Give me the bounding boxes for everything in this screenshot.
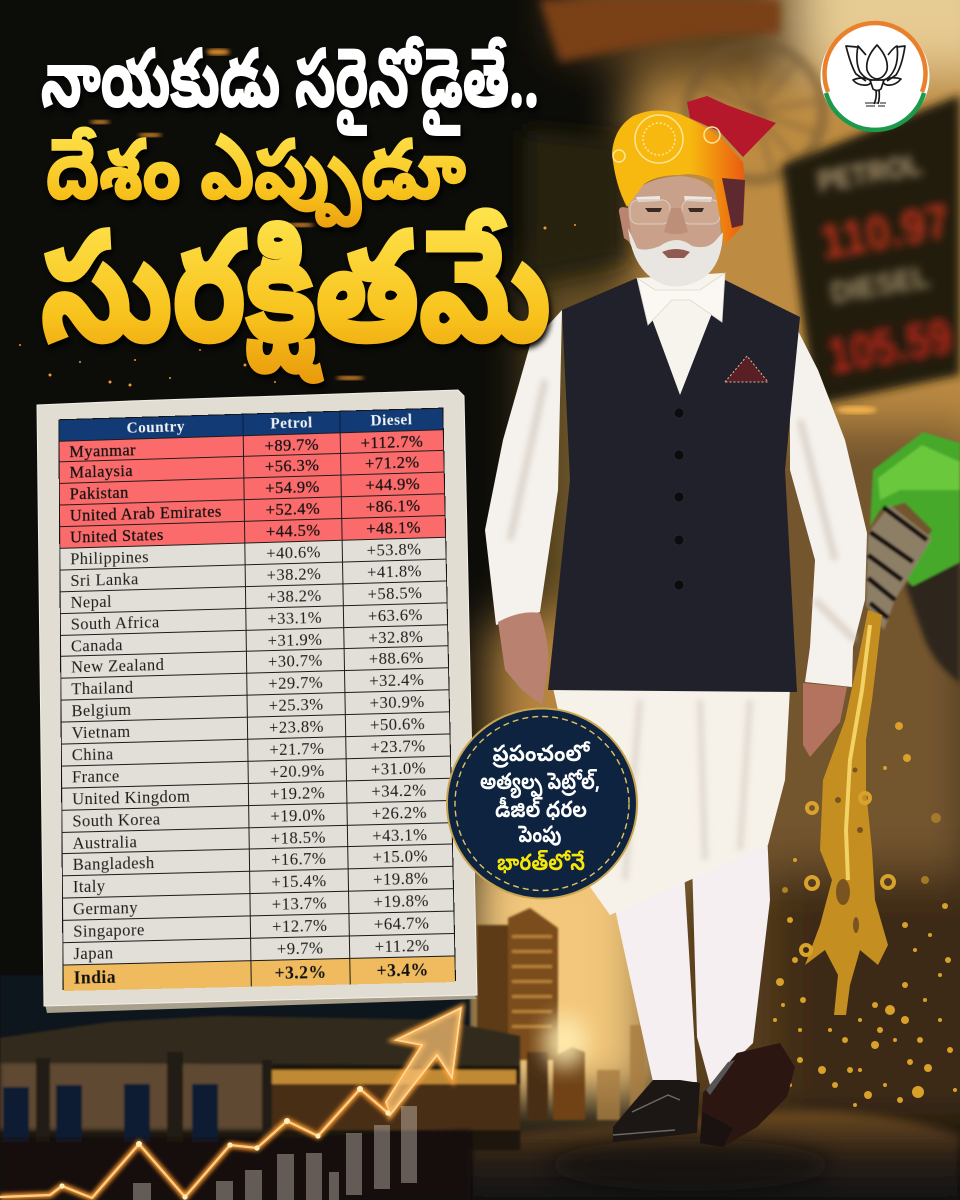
row: Canada: Canada — [71, 635, 123, 655]
row: Bangladesh: +15.0% — [372, 847, 428, 867]
row: Germany: +19.8% — [373, 891, 429, 912]
row: Belgium: Belgium — [71, 700, 132, 720]
row: Sri Lanka: Sri Lanka — [70, 569, 139, 590]
eyebrows — [636, 196, 712, 202]
row: Pakistan: +54.9% — [265, 477, 320, 498]
row: Italy: +15.4% — [271, 871, 327, 892]
row: Thailand: +32.4% — [369, 670, 424, 691]
row: Bangladesh: +16.7% — [271, 849, 326, 870]
row: Singapore — [63, 912, 454, 943]
title line 1: నాయకుడు సరైనోడైతే.. — [41, 36, 539, 145]
row: Malaysia: +71.2% — [365, 453, 420, 473]
dhoti — [553, 688, 790, 915]
row: United Arab Emirates — [60, 494, 445, 527]
mouth — [662, 249, 690, 258]
row: Vietnam: +23.8% — [269, 717, 324, 737]
turban — [612, 110, 745, 245]
row: Italy — [63, 867, 453, 899]
row: Canada — [61, 625, 448, 657]
row: Canada: +31.9% — [268, 629, 323, 650]
row: India highlighted: +3.2% — [274, 961, 327, 983]
beard — [628, 228, 723, 287]
red turban tail — [687, 96, 776, 157]
callout line 5: భారత్‌లోనే — [497, 850, 585, 882]
row: United Kingdom: +34.2% — [371, 780, 427, 801]
row: United Arab Emirates: United Arab Emirates — [70, 502, 222, 525]
row: United Kingdom: +19.2% — [270, 783, 325, 803]
head — [619, 176, 723, 287]
row: Nepal — [61, 581, 447, 614]
row: Malaysia: Malaysia — [69, 461, 133, 482]
left shoe — [613, 1080, 700, 1142]
row: China: +23.7% — [370, 736, 426, 757]
title line 3: సురక్షితమే — [41, 209, 551, 414]
row: Thailand: Thailand — [71, 678, 134, 699]
translucent bars — [133, 1106, 417, 1200]
row: Italy: Italy — [73, 877, 106, 897]
pocket square — [725, 356, 768, 382]
row: Sri Lanka — [60, 559, 446, 592]
row: Bangladesh — [63, 845, 452, 877]
row: India highlighted: India — [74, 966, 116, 988]
row: China: China — [72, 744, 114, 764]
vest buttons — [674, 408, 684, 590]
row: China: +21.7% — [269, 739, 324, 759]
row: Philippines — [60, 538, 446, 570]
row: New Zealand: +30.7% — [268, 651, 323, 672]
row: Nepal: +58.5% — [367, 583, 423, 603]
row: Japan — [63, 934, 454, 965]
row: Pakistan — [60, 473, 444, 506]
table header — [59, 409, 443, 441]
row: Canada: +32.8% — [368, 626, 423, 647]
callout line 3: డీజిల్ ధరల — [495, 797, 587, 829]
row: South Korea: +26.2% — [372, 802, 427, 823]
row: Vietnam — [62, 712, 450, 745]
row: France: France — [72, 766, 120, 786]
row: South Africa: +33.1% — [267, 607, 322, 628]
row: Myanmar: +89.7% — [265, 434, 319, 455]
row: South Africa — [61, 603, 447, 635]
row: Vietnam: Vietnam — [72, 722, 131, 742]
glasses — [630, 200, 720, 224]
row: Thailand — [61, 669, 449, 701]
arrow glow — [386, 1008, 461, 1115]
sparks — [19, 49, 576, 386]
callout line 2: అత్యల్ప పెట్రోల్, — [480, 769, 600, 801]
row: South Africa: +63.6% — [368, 605, 423, 625]
title line 2: దేశం ఎప్పుడూ — [46, 127, 466, 238]
row: United States: +48.1% — [366, 518, 421, 538]
row: India highlighted — [64, 956, 455, 991]
row: Japan: +9.7% — [277, 938, 324, 959]
row: Malaysia — [60, 451, 444, 484]
row: Nepal: Nepal — [71, 592, 112, 612]
row: Germany — [63, 889, 453, 921]
row: New Zealand: +88.6% — [369, 648, 424, 669]
dhoti folds — [625, 700, 750, 880]
row: Bangladesh: Bangladesh — [73, 853, 155, 874]
row: Germany: Germany — [73, 898, 138, 919]
callout line 1: ప్రపంచంలో — [492, 741, 591, 773]
row: Belgium: +30.9% — [369, 692, 425, 713]
row: Myanmar — [59, 430, 443, 463]
turban pattern — [613, 115, 720, 163]
shirt chest — [637, 273, 725, 395]
data points — [59, 1086, 391, 1200]
sleeve folds — [510, 380, 855, 640]
turban end stripes — [722, 178, 745, 228]
row: Philippines: +40.6% — [266, 542, 321, 563]
legs — [613, 830, 770, 1085]
row: Australia: Australia — [72, 832, 137, 852]
row: Belgium — [61, 690, 449, 723]
background scene: DIESEL — [828, 260, 932, 310]
nozzle ribs — [866, 505, 932, 630]
row: New Zealand — [61, 647, 448, 679]
row: Malaysia: +56.3% — [265, 456, 320, 476]
left sleeve — [485, 310, 562, 625]
row: Japan: +11.2% — [374, 936, 430, 956]
left hand — [498, 612, 548, 705]
row: Pakistan: Pakistan — [70, 483, 129, 504]
row: Singapore: +64.7% — [374, 913, 430, 934]
row: United States: United States — [70, 525, 164, 547]
shirt collar — [637, 273, 725, 325]
right hand — [803, 683, 847, 757]
row: Japan: Japan — [73, 943, 114, 963]
row: South Korea: +19.0% — [270, 805, 326, 825]
right shoe — [700, 1043, 795, 1147]
row: United Arab Emirates: +52.4% — [266, 499, 320, 519]
row: Sri Lanka: +38.2% — [267, 564, 321, 584]
gold splatter — [773, 722, 957, 1107]
row: South Africa: South Africa — [71, 612, 160, 633]
row: Nepal: +38.2% — [267, 586, 322, 606]
background scene: PETROL — [815, 148, 924, 199]
row: France — [62, 756, 451, 788]
table header: Diesel — [370, 411, 413, 429]
arrow head — [386, 1008, 461, 1115]
row: United Arab Emirates: +86.1% — [366, 496, 421, 516]
table header: Country — [127, 418, 185, 437]
row: United Kingdom — [62, 779, 451, 810]
row: Australia: +43.1% — [372, 824, 428, 845]
row: Philippines: +53.8% — [367, 539, 422, 560]
fuel price table — [58, 408, 456, 990]
row: Myanmar: Myanmar — [69, 440, 136, 461]
eyes — [645, 208, 704, 212]
row: United Kingdom: United Kingdom — [72, 786, 190, 808]
line — [0, 1089, 388, 1198]
row: Italy: +19.8% — [373, 869, 429, 889]
row: Vietnam: +50.6% — [370, 714, 425, 735]
row: Singapore: Singapore — [73, 920, 145, 941]
row: Pakistan: +44.9% — [365, 475, 420, 495]
right sleeve — [790, 315, 867, 687]
row: South Korea: South Korea — [72, 809, 161, 830]
row: India highlighted: +3.4% — [376, 959, 429, 981]
nose — [664, 208, 688, 234]
row: France: +20.9% — [270, 761, 325, 781]
row: Belgium: +25.3% — [269, 695, 324, 715]
nozzle body — [870, 432, 960, 586]
row: France: +31.0% — [371, 758, 426, 779]
row: Australia — [62, 823, 452, 855]
table header: Petrol — [270, 415, 313, 432]
callout line 4: పెంపు — [518, 823, 562, 854]
row: Thailand: +29.7% — [268, 673, 323, 693]
row: China — [62, 734, 450, 766]
glow line — [0, 1089, 388, 1198]
lotus icon — [846, 45, 905, 106]
row: Australia: +18.5% — [271, 827, 326, 847]
row: Germany: +13.7% — [272, 893, 327, 914]
row: New Zealand: New Zealand — [71, 655, 164, 677]
row: Sri Lanka: +41.8% — [367, 561, 422, 582]
row: United States — [60, 516, 445, 549]
vest — [548, 278, 800, 692]
row: United States: +44.5% — [266, 521, 321, 541]
row: Singapore: +12.7% — [272, 916, 328, 936]
row: Philippines: Philippines — [70, 547, 149, 568]
row: South Korea — [62, 801, 451, 832]
row: Myanmar: +112.7% — [360, 431, 423, 452]
